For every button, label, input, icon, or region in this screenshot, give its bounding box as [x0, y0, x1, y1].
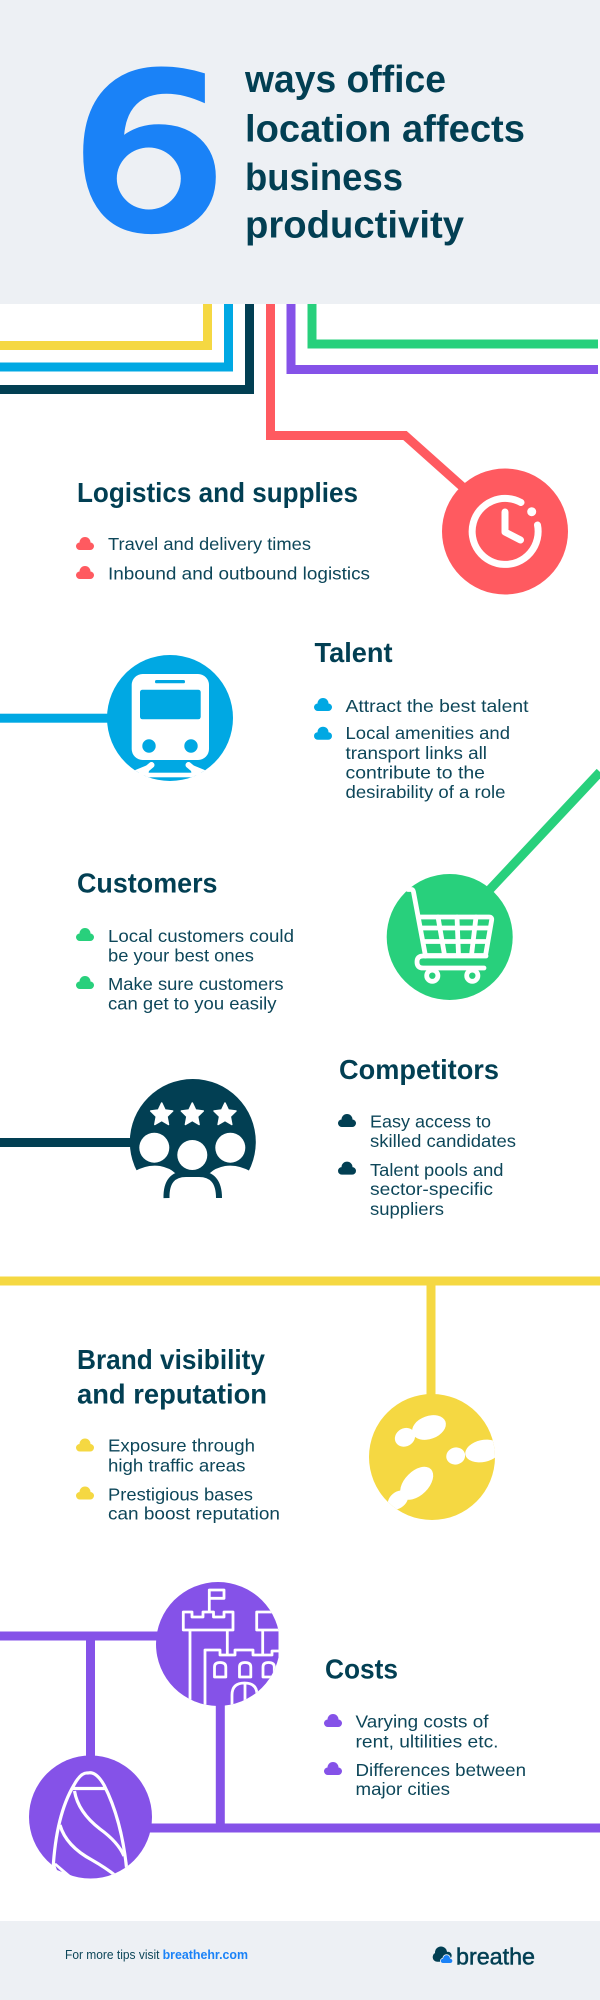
yellow line	[0, 304, 208, 346]
bullet: amenities: contribute to the	[346, 763, 485, 783]
panel: costs	[0, 1582, 600, 1880]
green line	[312, 304, 598, 344]
bullet: differences: Differences between	[356, 1760, 526, 1780]
bullet: local customers: Local customers could	[108, 926, 294, 946]
panel: logistics and supplies	[76, 304, 568, 594]
bullet: access	[76, 974, 284, 1013]
icon: clock	[442, 468, 568, 594]
icon: shopping cart	[387, 874, 513, 1000]
bullet: amenities: Local amenities and	[346, 723, 510, 743]
bullet: amenities	[314, 723, 510, 802]
title: business	[245, 157, 403, 199]
green connector	[480, 772, 600, 900]
bullet: talent pools: sector-specific	[370, 1179, 493, 1199]
bullet: amenities: transport links all	[346, 743, 487, 763]
title	[244, 59, 525, 246]
heading: Costs	[325, 1654, 398, 1685]
footer panel	[0, 1921, 600, 2000]
bullet: candidates: Easy access to	[370, 1111, 491, 1131]
bullet: prestige	[76, 1484, 280, 1524]
title: location affects	[245, 108, 525, 150]
bullet: talent pools: suppliers	[370, 1199, 444, 1219]
heading: Talent	[314, 637, 392, 668]
bullet: attract: Attract the best talent	[346, 696, 529, 716]
header panel	[0, 0, 600, 304]
title: ways office	[244, 59, 446, 101]
footer link text	[65, 1948, 248, 1962]
bullet: varying costs: rent, ultilities etc.	[356, 1732, 498, 1752]
heading: Logistics and supplies	[77, 477, 358, 508]
icon: castle	[156, 1582, 285, 1710]
panel: competitors	[0, 1054, 516, 1219]
bullet: talent pools	[338, 1160, 504, 1219]
bullet: exposure: Exposure through	[108, 1436, 255, 1456]
heading: Brand visibility	[77, 1344, 265, 1375]
heading	[77, 1344, 267, 1410]
purple line	[291, 304, 598, 370]
panel: customers	[76, 772, 600, 1013]
footer link text: breathehr.com	[163, 1948, 248, 1962]
bullet: local customers: be your best ones	[108, 945, 254, 965]
bullet: differences: major cities	[356, 1779, 450, 1799]
heading: Competitors	[339, 1054, 499, 1085]
bullet: candidates: skilled candidates	[370, 1131, 516, 1151]
red connector	[270, 304, 475, 498]
bullet: talent pools: Talent pools and	[370, 1160, 504, 1180]
sky blue connector	[0, 714, 112, 723]
heading: Customers	[77, 867, 218, 898]
bullet: exposure: high traffic areas	[108, 1456, 246, 1476]
purple connectors	[0, 1636, 600, 1828]
bullet: varying costs	[324, 1712, 498, 1752]
heading: and reputation	[77, 1379, 267, 1410]
title: productivity	[245, 204, 464, 246]
connector lines leaving the header	[0, 304, 598, 390]
yellow connector	[0, 1281, 600, 1400]
bullet: access: Make sure customers	[108, 974, 284, 994]
bullet: exposure	[76, 1436, 255, 1476]
big number 6: 6	[69, 26, 228, 284]
icon: train	[107, 655, 233, 790]
bullet: differences	[324, 1760, 526, 1799]
bullet: logistics: Inbound and outbound logistics	[108, 564, 370, 584]
logo: breathe	[456, 1943, 535, 1969]
bullet: local customers	[76, 926, 294, 965]
icon: footprints	[369, 1394, 503, 1520]
bullet: access: can get to you easily	[108, 993, 277, 1013]
dark connector	[0, 1138, 132, 1147]
bullet: prestige: can boost reputation	[108, 1504, 280, 1524]
icon: gherkin tower	[29, 1756, 152, 1880]
footer link text: For more tips visit	[65, 1948, 160, 1962]
bullet: prestige: Prestigious bases	[108, 1484, 253, 1504]
sky blue line	[0, 304, 228, 367]
bullet: varying costs: Varying costs of	[356, 1712, 489, 1732]
panel: talent	[0, 637, 529, 802]
bullet: travel: Travel and delivery times	[108, 534, 311, 554]
bullet: candidates	[338, 1111, 516, 1151]
dark line	[0, 304, 250, 390]
bullet: amenities: desirability of a role	[346, 782, 506, 802]
icon: rated people	[122, 1079, 262, 1215]
panel: brand visibility and reputation	[0, 1281, 600, 1524]
